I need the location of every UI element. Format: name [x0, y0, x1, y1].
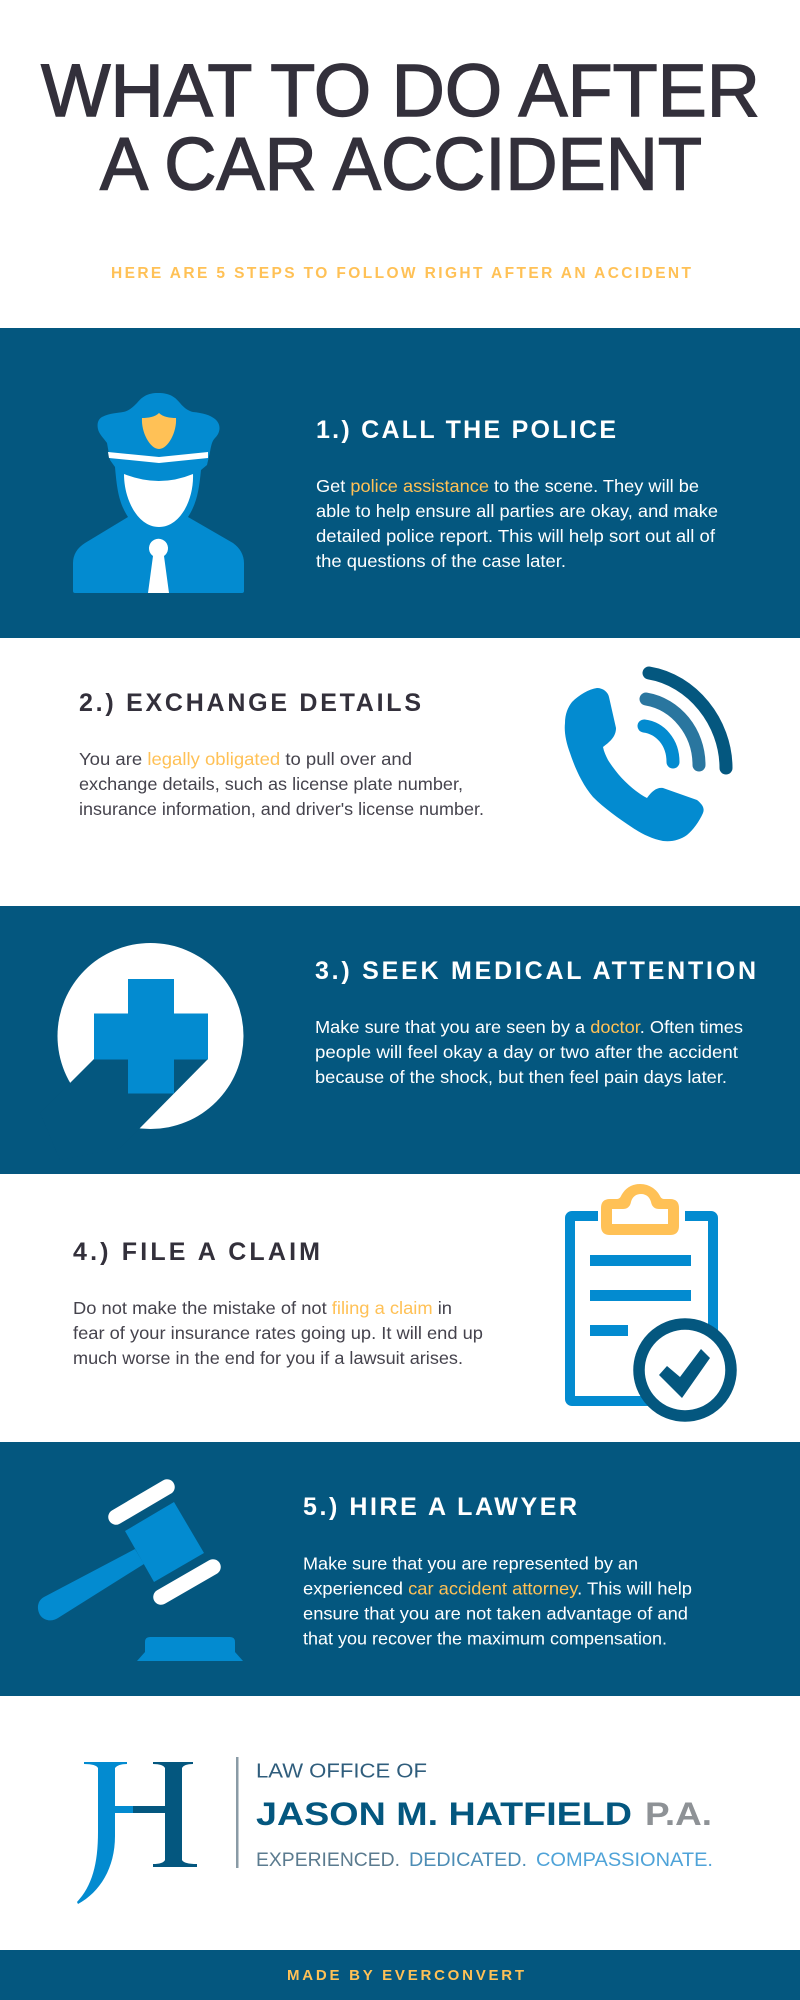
text block: step 5: ensure that you are not taken advantage of and — [303, 1604, 688, 1624]
text block: step 5: that you recover the maximum compensation. — [303, 1628, 667, 1648]
icon: clipboard with check — [570, 1184, 731, 1416]
title — [41, 49, 760, 206]
text block: step 1: detailed police report. This will help sort out all of — [316, 526, 715, 546]
text block: step 2: You are legally obligated to pull over and — [79, 749, 412, 769]
logo text: law office of: LAW OFFICE OF — [256, 1760, 427, 1782]
logo text: firm name: JASON M. HATFIELD — [256, 1796, 632, 1832]
panel: step 3 seek medical attention — [0, 906, 800, 1174]
text block: step 3: because of the shock, but then feel pain days later. — [315, 1067, 727, 1087]
icon: gavel — [38, 1487, 243, 1661]
text block: step 1 — [316, 476, 718, 571]
icon: medical cross — [40, 943, 244, 1160]
logo text: tagline: EXPERIENCED. — [256, 1850, 400, 1871]
text block: step 3 — [315, 1017, 743, 1087]
footer — [0, 1950, 800, 2000]
icon part: face — [124, 474, 193, 527]
logo text: tagline — [256, 1850, 713, 1871]
panel: step 2 exchange details — [79, 673, 726, 841]
heading: step 4: 4.) FILE A CLAIM — [73, 1238, 320, 1266]
icon: JH monogram — [77, 1762, 197, 1904]
text block: step 1: Get police assistance to the scene. They will be — [316, 476, 699, 496]
icon: phone — [565, 673, 726, 841]
logo text: firm name: P.A. — [645, 1796, 712, 1832]
footer: MADE BY EVERCONVERT — [287, 1967, 524, 1984]
text block: step 2: insurance information, and driver's license number. — [79, 799, 484, 819]
panel: step 1 call the police — [0, 328, 800, 638]
heading: step 5: 5.) HIRE A LAWYER — [303, 1493, 577, 1521]
icon part: inner signal arc — [644, 726, 673, 762]
icon part: outer signal arc — [649, 673, 726, 768]
icon part: tie — [148, 539, 169, 593]
heading: step 3: 3.) SEEK MEDICAL ATTENTION — [315, 957, 756, 985]
heading: step 2: 2.) EXCHANGE DETAILS — [79, 689, 421, 717]
panel: step 4 file a claim — [73, 1184, 731, 1416]
text block: step 4: Do not make the mistake of not filing a claim in — [73, 1298, 452, 1318]
logo text: tagline: DEDICATED. — [409, 1850, 527, 1871]
panel: law office logo — [77, 1757, 713, 1904]
title: WHAT TO DO AFTER — [41, 49, 760, 132]
text block: step 5: Make sure that you are represented by an — [303, 1554, 638, 1574]
icon part: middle signal arc — [646, 699, 699, 765]
text block: step 3: people will feel okay a day or two after the accident — [315, 1042, 738, 1062]
text block: step 2 — [79, 749, 484, 819]
logo text: tagline: COMPASSIONATE. — [536, 1850, 713, 1871]
text block: step 1: the questions of the case later. — [316, 551, 566, 571]
text block: step 1: able to help ensure all parties are okay, and make — [316, 501, 718, 521]
text block: step 4: much worse in the end for you if a lawsuit arises. — [73, 1348, 463, 1368]
text block: step 5: experienced car accident attorney . This will help — [303, 1578, 692, 1598]
icon part: badge — [142, 413, 176, 449]
subtitle: HERE ARE 5 STEPS TO FOLLOW RIGHT AFTER AN ACCIDENT — [111, 265, 692, 282]
text block: step 4 — [73, 1298, 483, 1368]
text block: step 2: exchange details, such as license plate number, — [79, 774, 463, 794]
text block: step 4: fear of your insurance rates going up. It will end up — [73, 1323, 483, 1343]
text block: step 3: Make sure that you are seen by a doctor. Often times — [315, 1017, 743, 1037]
text block: step 5 — [303, 1554, 692, 1648]
icon: police officer — [73, 393, 244, 593]
panel: step 5 hire a lawyer — [0, 1442, 800, 1696]
heading: step 1: 1.) CALL THE POLICE — [316, 416, 616, 444]
title: A CAR ACCIDENT — [100, 123, 702, 206]
icon part: cap band — [108, 452, 208, 463]
